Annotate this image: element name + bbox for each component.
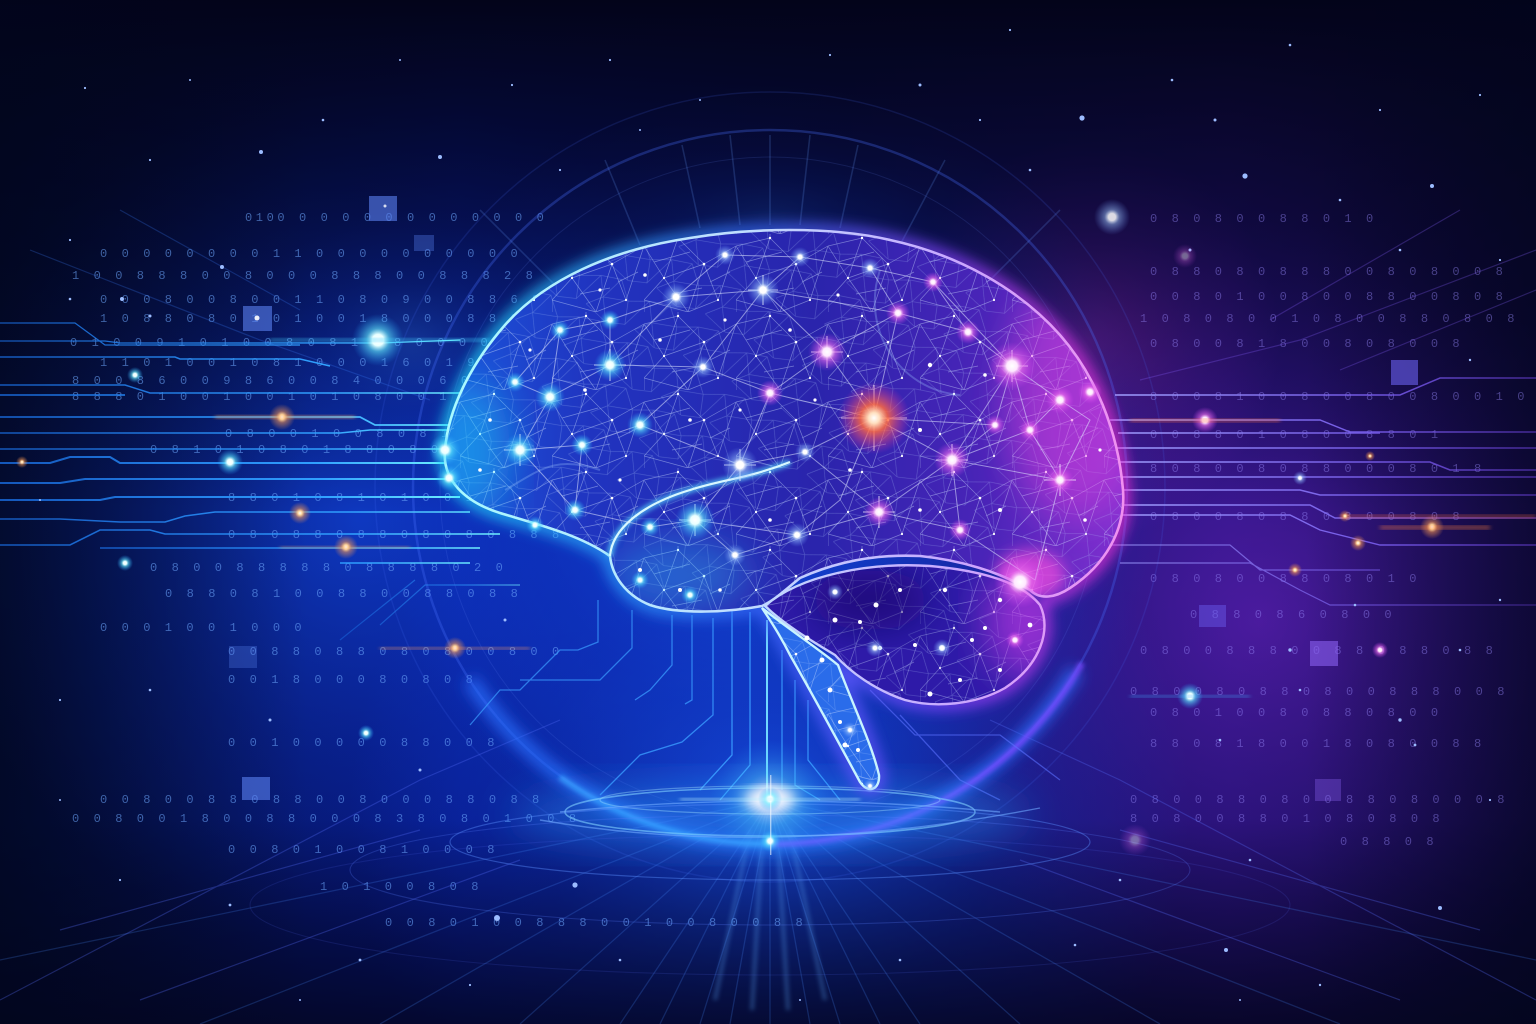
binary digits: left field: 8 0 0 8 6 0 0 9 8 6 0 0 8 4 0 0 0 6 0 8 8 0 <box>72 374 536 388</box>
brain <box>429 225 1145 795</box>
circuit floor platform <box>250 783 1290 975</box>
binary digits: left field: 0 0 1 0 0 0 0 0 8 8 0 0 8 <box>228 736 498 750</box>
binary digits: left field: 8 8 0 1 0 8 1 0 1 0 0 1 0 <box>228 491 498 505</box>
cerebellum <box>764 564 1046 706</box>
binary digits: right field: 0 8 0 0 8 0 8 8 0 8 0 0 8 8 8 0 0 8 <box>1130 685 1508 699</box>
binary digits: right field: 0 8 8 0 8 0 8 8 8 0 0 8 0 8 0 0 8 <box>1150 265 1506 279</box>
cerebrum <box>430 225 1145 620</box>
binary digits: right field: 0 8 0 0 8 8 8 0 0 8 8 0 8 8 0 8 8 <box>1140 644 1496 658</box>
binary digits: left field: 1 1 0 1 0 0 1 0 8 1 0 0 0 1 6 0 1 9 0 0 <box>100 356 521 370</box>
binary digits: right field: 0 8 8 0 8 6 0 8 0 0 <box>1190 608 1395 622</box>
binary digits: right field: 0 8 0 1 0 0 8 0 8 8 0 8 0 0 <box>1150 706 1442 720</box>
binary digits: left field: 0 8 0 8 8 0 8 8 0 8 0 8 0 8 8 8 0 1 0 <box>228 528 628 542</box>
binary digits: right field: 8 0 8 0 0 8 8 0 1 0 8 0 8 0 8 <box>1130 812 1443 826</box>
binary digits: right field <box>1130 212 1528 849</box>
binary digits: right field: 0 8 0 8 0 0 8 8 0 8 0 1 0 <box>1150 572 1420 586</box>
binary digits: right field: 0 8 0 0 8 1 8 0 0 8 0 8 0 0 8 <box>1150 337 1463 351</box>
binary digits: left field: 1 0 8 8 0 8 0 1 0 1 0 0 1 8 0 0 0 8 8 0 0 8 <box>100 312 564 326</box>
binary digits: left field: 0 1 0 0 9 1 0 1 0 0 8 0 8 1 0 8 0 0 0 0 8 0 0 0 0 <box>70 336 599 350</box>
binary digits: right field: 0 8 0 8 0 0 8 8 0 1 0 <box>1150 212 1377 226</box>
binary digits: left field: 0100 0 0 0 0 0 0 0 0 0 0 0 0 <box>245 211 547 225</box>
brain outer glow <box>445 230 1123 789</box>
binary digits: left field: 0 0 0 8 0 0 8 0 0 1 1 0 8 0 9 0 0 8 8 6 8 8 8 <box>100 293 586 307</box>
binary digits: left field: 1 0 1 0 0 8 0 8 <box>320 880 482 894</box>
binary digits: left field: 0 0 8 8 0 8 8 0 8 0 8 0 0 8 0 0 <box>228 645 563 659</box>
circuit traces: below brain <box>470 600 1060 800</box>
glowing flares <box>16 199 1536 856</box>
circuit traces: right <box>1100 378 1536 605</box>
glowing neuron nodes <box>429 245 1102 738</box>
circuit traces: left <box>0 323 520 640</box>
binary digits: left field: 0 0 8 0 1 0 0 8 1 0 0 0 8 <box>228 843 498 857</box>
binary digits: left field: 0 8 0 0 8 8 8 8 8 0 8 8 8 8 0 2 0 <box>150 561 506 575</box>
binary digits: left field: 0 8 1 0 1 0 8 0 1 8 8 0 8 0 0 8 0 0 1 0 <box>150 443 571 457</box>
binary digits: right field: 1 0 8 0 8 0 0 1 0 8 0 0 8 8 0 8 0 8 <box>1140 312 1518 326</box>
binary digits: left field: 0 8 0 0 1 0 0 8 0 8 1 0 0 0 <box>225 427 517 441</box>
binary digits: left field: 0 0 8 0 1 0 0 8 8 8 0 0 1 0 0 8 0 0 8 8 <box>385 916 806 930</box>
small synapse dots <box>478 273 1102 752</box>
binary digits: left field: 0 8 8 0 8 1 0 0 8 8 0 0 8 8 0 8 8 <box>165 587 521 601</box>
temporal lobe fold <box>505 270 960 556</box>
binary digits: right field: 0 0 8 8 0 1 0 8 0 0 8 8 0 1 <box>1150 428 1442 442</box>
binary digits: right field: 8 8 0 8 1 8 0 0 1 8 0 8 0 0 8 8 <box>1150 737 1485 751</box>
binary digits: left field: 0 0 1 8 0 0 0 8 0 8 0 8 <box>228 673 476 687</box>
binary digits: right field: 0 8 0 0 8 8 0 8 0 0 8 8 0 8 0 0 0 8 <box>1130 793 1508 807</box>
neuron starbursts <box>504 275 1076 536</box>
binary digits: left field: 8 8 8 0 1 0 0 1 0 0 1 0 1 0 8 0 0 1 0 0 1 <box>72 390 515 404</box>
brainstem <box>760 605 885 795</box>
binary digits: right field: 8 0 8 0 0 8 0 8 8 0 0 0 8 0 1 8 <box>1150 462 1485 476</box>
binary digits: left field: 0 0 8 0 0 1 8 0 0 8 8 0 0 0 8 3 8 0 8 0 1 0 0 8 <box>72 812 580 826</box>
base flare <box>680 740 860 860</box>
binary digits: left field: 0 0 0 0 0 0 0 0 1 1 0 0 0 0 0 0 0 0 0 0 <box>100 247 521 261</box>
data squares <box>229 196 1418 801</box>
binary digits: left field <box>70 211 806 930</box>
binary digits: left field: 1 0 0 8 8 8 0 0 8 0 0 0 8 8 8 0 0 8 8 8 2 8 <box>72 269 536 283</box>
binary digits: right field: 0 8 8 0 8 <box>1340 835 1437 849</box>
binary digits: right field: 0 8 0 0 8 0 8 8 0 8 0 0 8 0 8 <box>1150 510 1463 524</box>
neural connections <box>515 255 1090 580</box>
binary digits: left field: 0 0 8 0 0 8 8 0 8 8 0 0 8 0 0 0 8 8 0 8 8 <box>100 793 543 807</box>
binary digits: left field: 0 0 0 1 0 0 1 0 0 0 <box>100 621 305 635</box>
binary digits: right field: 0 0 8 0 1 0 0 8 0 0 8 8 0 0 8 0 8 <box>1150 290 1506 304</box>
holographic ring <box>375 92 1165 882</box>
binary digits: right field: 8 0 0 8 1 0 0 8 0 0 8 0 0 8 0 0 1 0 <box>1150 390 1528 404</box>
